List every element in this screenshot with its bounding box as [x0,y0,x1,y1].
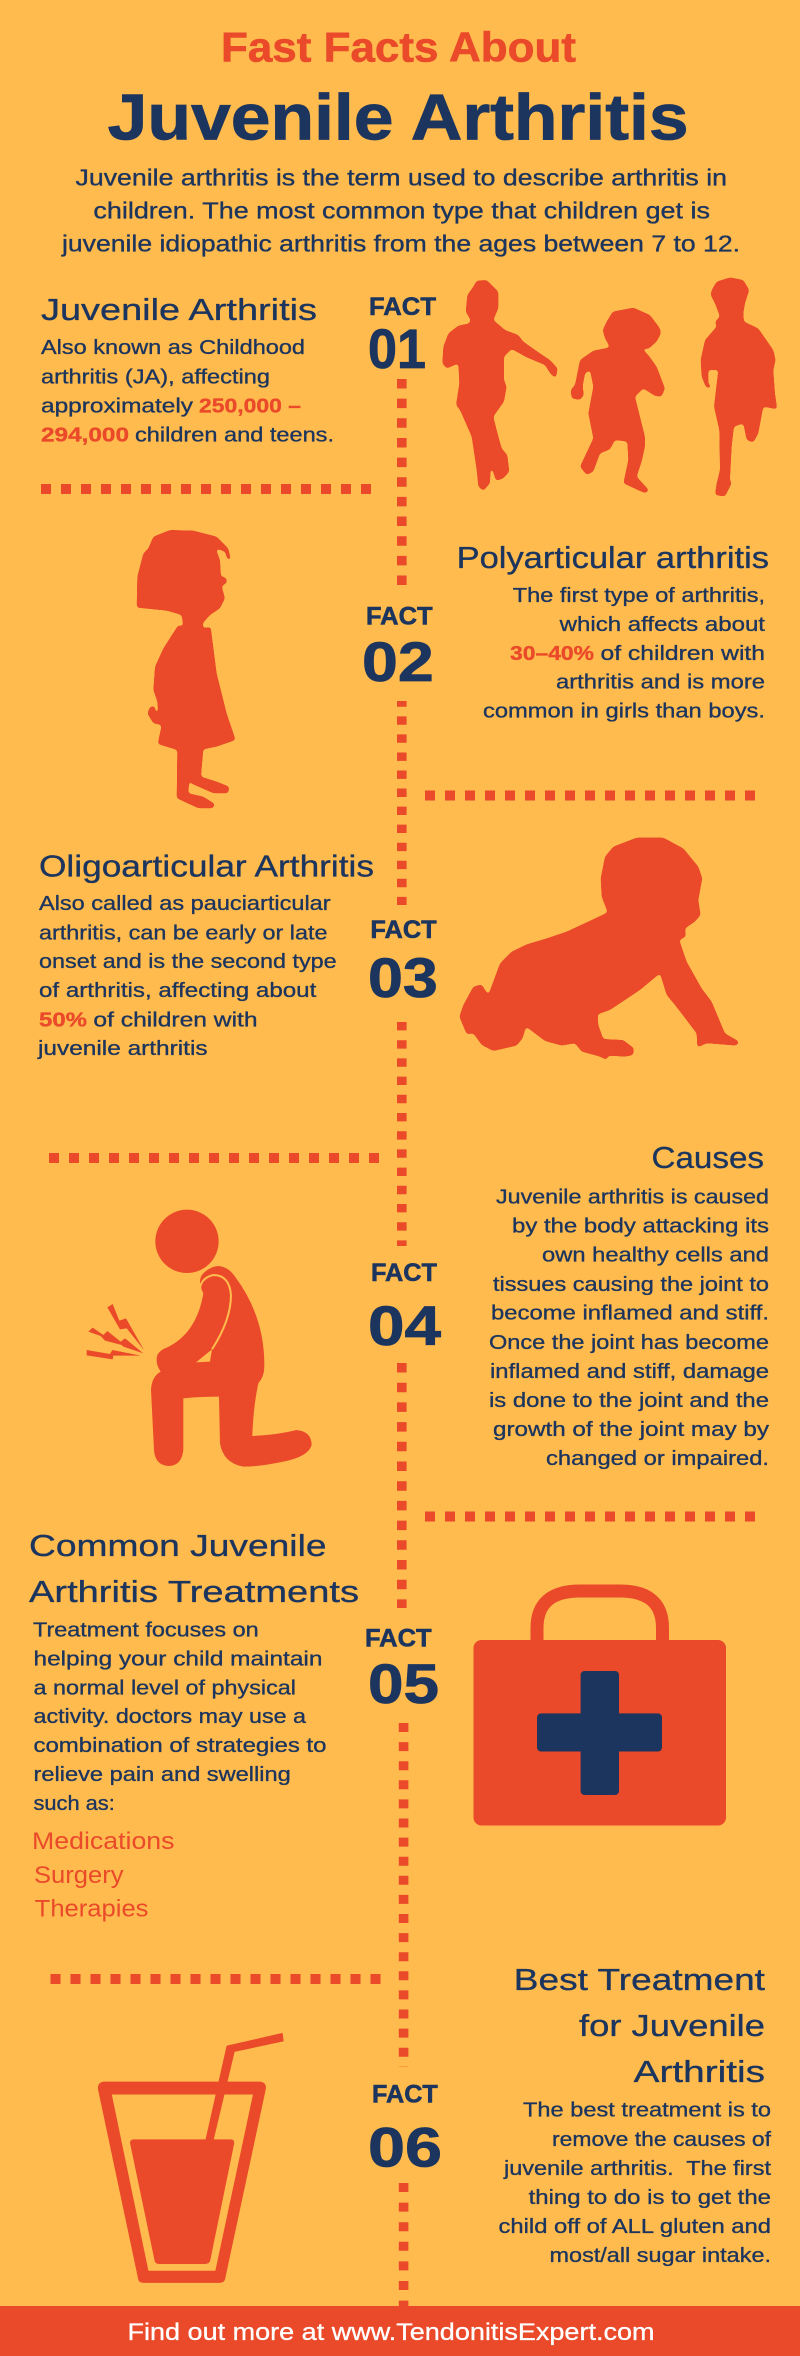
panel: fact 01 text [41,292,334,446]
header [61,24,740,257]
body text [498,2099,771,2267]
intro text [61,165,740,257]
body text: such as: [34,1792,115,1815]
section dividers [41,489,756,1979]
fact 06 label [368,2080,442,2178]
heading: Oligoarticular Arthritis [39,849,374,884]
fact 04 label: FACT [371,1259,437,1287]
intro text: children. The most common type that children get is [93,197,710,223]
treatment list: Medications [32,1828,174,1855]
treatment list: Therapies [35,1896,149,1923]
panel: fact 05 text [29,1528,359,1923]
body text: remove the causes of [552,2128,771,2151]
icon: first aid kit [474,1591,726,1826]
heading: Juvenile Arthritis [41,292,317,327]
fact 01 label: 01 [368,317,426,380]
intro text: Juvenile arthritis is the term used to describe arthritis in [76,165,727,191]
treatment list: Surgery [34,1862,124,1889]
body text: juvenile arthritis. The first [503,2157,771,2180]
body text [41,336,334,446]
body text: children and teens. [135,423,334,446]
body text: 250,000 – [199,394,301,417]
icon: standing girl [137,530,236,808]
heading: Arthritis Treatments [29,1574,359,1609]
body text: The first type of arthritis, [513,584,765,607]
body text: child off of ALL gluten and [498,2215,771,2238]
panel: fact 02 text [457,540,769,723]
body text: of children with [600,642,765,665]
body text [33,1618,326,1815]
body text: Once the joint has become [489,1331,769,1354]
body text: common in girls than boys. [483,700,765,723]
body text: activity. doctors may use a [34,1705,307,1728]
body text: The best treatment is to [523,2099,771,2122]
body text [489,1185,770,1470]
fact 05 label: 05 [368,1652,439,1715]
footer bar [0,2306,800,2356]
body text: 30–40% [510,642,594,665]
body text: become inflamed and stiff. [491,1302,769,1324]
heading [29,1528,359,1609]
body text: combination of strategies to [34,1734,326,1757]
body text: onset and is the second type [39,950,337,973]
body text: changed or impaired. [546,1447,769,1470]
title: Fast Facts About: Fast Facts About [221,24,576,71]
heading: Polyarticular arthritis [457,540,769,575]
panel: fact 03 text [37,849,374,1060]
body text: a normal level of physical [34,1677,296,1700]
heading: Arthritis [634,2054,765,2089]
body text: Juvenile arthritis is caused [496,1185,769,1208]
fact 03 label [368,916,438,1009]
body text: Also called as pauciarticular [39,892,331,915]
icon: kneeling figure with knee pain [87,1210,312,1467]
body text: growth of the joint may by [493,1418,770,1441]
body text: inflamed and stiff, damage [490,1360,769,1383]
panel: fact 04 text [489,1140,770,1470]
body text: relieve pain and swelling [34,1763,291,1786]
body text: of arthritis, affecting about [39,979,317,1002]
footer text: Find out more at www.TendonitisExpert.com [128,2319,654,2346]
body text: is done to the joint and the [489,1389,769,1412]
panel: fact 06 text [498,1962,771,2267]
fact 02 label: 02 [362,630,434,693]
fact 03 label: 03 [368,946,438,1009]
heading: Common Juvenile [29,1528,326,1563]
icon: three running children [442,277,777,497]
body text: arthritis and is more [556,670,765,694]
body text: own healthy cells and [542,1244,769,1267]
fact 01 label: FACT [369,293,436,321]
fact 01 label [368,293,436,380]
body text: arthritis, can be early or late [39,922,328,944]
heading: Best Treatment [514,1962,765,1997]
body text: approximately [41,394,194,417]
body text: of children with [93,1008,258,1031]
fact 04 label [368,1259,441,1357]
heading: for Juvenile [579,2008,765,2043]
body text [37,892,337,1060]
body text: helping your child maintain [34,1648,322,1670]
fact 02 label [362,602,434,693]
fact 03 label: FACT [370,916,437,944]
heading [514,1962,765,2089]
fact 04 label: 04 [368,1294,441,1357]
body text: which affects about [559,613,765,636]
fact 06 label: 06 [368,2116,442,2178]
body text: most/all sugar intake. [550,2244,771,2267]
fact 05 label [365,1625,439,1715]
heading: Causes [652,1140,764,1175]
fact 05 label: FACT [365,1625,432,1653]
fact 02 label: FACT [366,602,433,630]
body text: tissues causing the joint to [493,1273,769,1296]
body text [483,584,765,723]
body text: by the body attacking its [512,1215,769,1238]
body text: Treatment focuses on [33,1618,259,1641]
body text: juvenile arthritis [37,1037,208,1060]
intro text: juvenile idiopathic arthritis from the ages between 7 to 12. [61,231,740,257]
body text: 50% [39,1008,87,1031]
body text: arthritis (JA), affecting [41,365,270,388]
icon: crawling baby [459,838,739,1060]
fact 06 label: FACT [372,2080,438,2108]
title: Juvenile Arthritis: Juvenile Arthritis [108,80,689,153]
body text: Also known as Childhood [41,336,305,359]
body text: thing to do is to get the [529,2186,771,2209]
treatment list [32,1828,174,1923]
icon: glass with straw [98,2033,283,2282]
body text: 294,000 [41,423,129,446]
timeline dotted connectors [402,379,404,2306]
